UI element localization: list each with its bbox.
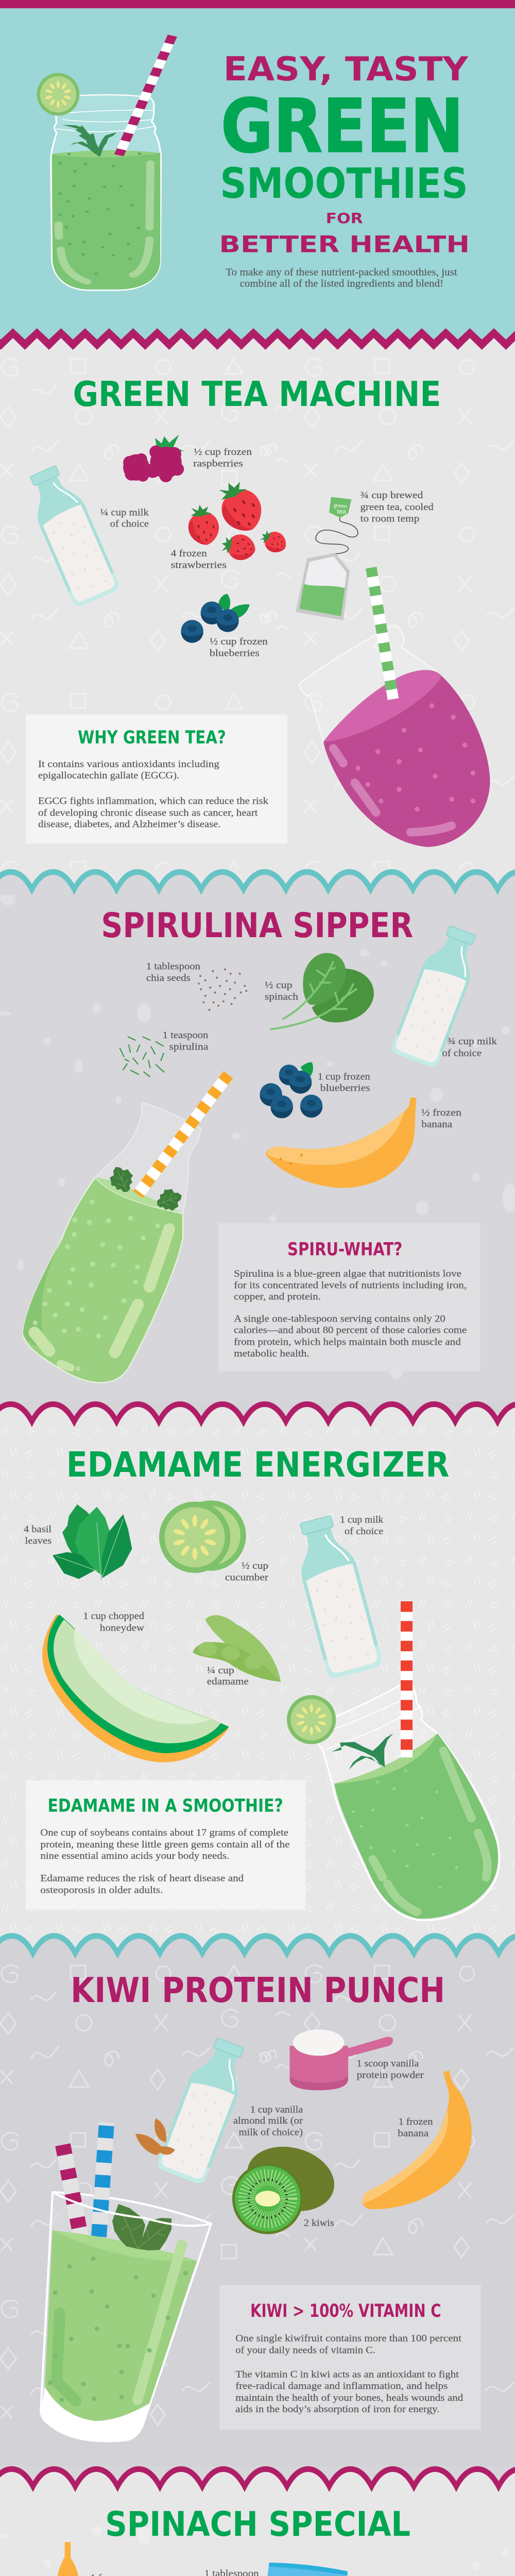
label: strawberries: 4 frozen — [171, 548, 207, 559]
icon: blueberries — [260, 1062, 322, 1118]
panel: kiwi protein punch — [71, 1970, 481, 2430]
title — [219, 49, 470, 258]
label: blueberries — [210, 636, 268, 658]
intro text — [226, 266, 457, 290]
label: blueberries: ½ cup frozen — [210, 636, 268, 647]
label: milk: of choice — [345, 1526, 383, 1537]
panel: edamame in a smoothie: EDAMAME IN A SMOOTHIE? — [47, 1795, 283, 1816]
label: almond milk — [233, 2105, 303, 2138]
icon: green smoothie jar — [287, 1601, 500, 1920]
heading: KIWI PROTEIN PUNCH — [71, 1970, 445, 2010]
label: raspberries — [193, 447, 252, 469]
panel: spiru-what: copper, and protein. — [234, 1292, 321, 1302]
label: banana: ½ frozen — [421, 1108, 462, 1118]
panel: edamame in a smoothie: One cup of soybeans contains about 17 grams of complete — [40, 1827, 288, 1838]
label: milk — [100, 507, 149, 530]
label: honeydew: honeydew — [100, 1623, 144, 1634]
label: raspberries: raspberries — [193, 458, 243, 469]
panel: kiwi vitamin c: KIWI > 100% VITAMIN C — [250, 2300, 441, 2321]
label: spinach: ½ cup — [265, 980, 293, 991]
panel: kiwi vitamin c: The vitamin C in kiwi acts as an antioxidant to fight — [235, 2369, 459, 2380]
label: basil: 4 basil — [24, 1524, 52, 1535]
panel: spirulina sipper — [23, 905, 497, 1383]
label: green tea: to room temp — [360, 514, 419, 524]
heading: SPIRULINA SIPPER — [101, 905, 413, 945]
icon: almond milk bottle — [135, 2033, 254, 2186]
icon: protein scoop — [290, 2029, 393, 2090]
label: green tea: ¾ cup brewed — [360, 490, 423, 501]
icon: milk bottle, green tea — [20, 461, 121, 608]
icon: edamame — [193, 1615, 281, 1682]
label: blueberries: 1 cup frozen — [318, 1071, 370, 1082]
icon: milk bottle, edamame — [288, 1512, 384, 1680]
label: almond milk: milk of choice) — [239, 2127, 303, 2138]
label: honeydew: 1 cup chopped — [83, 1611, 144, 1622]
icon: chia seeds — [199, 970, 246, 1010]
label: banana — [421, 1108, 462, 1130]
panel: spiru-what: from protein, which helps maintain both muscle and — [234, 1337, 461, 1348]
label: chia seeds — [146, 961, 200, 984]
intro text: combine all of the listed ingredients and blend! — [240, 278, 443, 290]
icon: milk bottle, spirulina — [390, 922, 486, 1069]
icon: tea bag — [296, 497, 358, 620]
panel: spiru-what: for its concentrated levels of nutrients including iron, — [234, 1280, 467, 1291]
icon: cucumber — [159, 1500, 246, 1573]
label: strawberries — [171, 548, 227, 570]
label: blueberries: blueberries — [320, 1083, 370, 1094]
label: honeydew — [83, 1611, 144, 1634]
icon: banana — [362, 2071, 472, 2209]
icon: spirulina powder — [120, 1037, 164, 1077]
icon: tea bag: green — [333, 503, 347, 510]
label: raspberries: ½ cup frozen — [194, 447, 252, 457]
label: basil — [24, 1524, 52, 1547]
icon: green smoothie mason jar — [37, 36, 173, 290]
label: milk: of choice — [442, 1048, 482, 1059]
label: cucumber — [225, 1561, 269, 1583]
icon: spinach — [271, 953, 374, 1029]
panel: kiwi vitamin c: free-radical damage and inflammation, and helps — [235, 2381, 448, 2392]
panel: why green tea: WHY GREEN TEA? — [78, 727, 226, 748]
panel: edamame in a smoothie: Edamame reduces the risk of heart disease and — [40, 1873, 244, 1884]
label: spinach: spinach — [265, 991, 299, 1002]
label: strawberries: strawberries — [171, 560, 227, 570]
label: edamame: ¼ cup — [207, 1665, 234, 1676]
label: milk: ¾ cup milk — [448, 1036, 497, 1047]
label: almond milk: 1 cup vanilla — [250, 2105, 303, 2115]
label: protein powder — [357, 2058, 424, 2081]
panel: edamame energizer — [24, 1445, 500, 1920]
label: green tea — [360, 490, 434, 524]
label: milk: 1 cup milk — [340, 1515, 384, 1526]
panel: edamame in a smoothie: osteoporosis in older adults. — [40, 1885, 163, 1895]
panel: kiwi vitamin c — [219, 2285, 481, 2430]
panel: kiwi vitamin c: aids in the body’s absorption of iron for energy. — [235, 2404, 439, 2415]
label: milk: ¼ cup milk — [100, 507, 149, 518]
icon: raspberries — [123, 434, 184, 482]
title: FOR — [326, 210, 363, 227]
panel: kiwi vitamin c: One single kiwifruit contains more than 100 percent — [235, 2333, 462, 2344]
heading: GREEN TEA MACHINE — [73, 374, 441, 414]
label: almond milk: almond milk (or — [233, 2115, 303, 2126]
label: basil: leaves — [25, 1536, 52, 1547]
panel: spiru-what: metabolic health. — [234, 1348, 310, 1359]
label: milk — [340, 1515, 384, 1537]
panel: spinach special — [57, 2504, 494, 2576]
panel: why green tea: disease, diabetes, and Alzheimer’s disease. — [38, 819, 221, 830]
icon: smoothie glass with two straws — [41, 2123, 211, 2441]
panel: why green tea: It contains various antioxidants including — [38, 759, 220, 770]
label: protein powder: protein powder — [357, 2070, 424, 2081]
label: cucumber: ½ cup — [242, 1561, 268, 1571]
panel: spiru-what: SPIRU-WHAT? — [287, 1239, 402, 1260]
icon: purple smoothie jar — [299, 568, 490, 847]
panel: why green tea: of developing chronic disease such as cancer, heart — [38, 807, 258, 818]
panel: header — [37, 36, 470, 290]
label: milk — [442, 1036, 497, 1059]
panel: spiru-what: A single one-tablespoon serving contains only 20 — [234, 1313, 445, 1324]
panel: edamame in a smoothie: protein, meaning these little green gems contain all of the — [40, 1839, 290, 1850]
icon: honeydew melon — [42, 1615, 229, 1762]
panel: why green tea: EGCG fights inflammation, which can reduce the risk — [38, 795, 269, 806]
label: milk: of choice — [110, 519, 149, 530]
label: blueberries — [318, 1071, 370, 1094]
icon: basil leaves — [53, 1504, 132, 1580]
label: spirulina: 1 teaspoon — [163, 1030, 209, 1041]
panel: spiru-what: Spirulina is a blue-green algae that nutritionists love — [234, 1268, 461, 1279]
label: banana: banana — [398, 2128, 429, 2139]
icon: peanut butter jar — [253, 2563, 348, 2576]
panel: edamame in a smoothie — [26, 1781, 305, 1909]
panel: spiru-what: calories—and about 80 percent of those calories come — [234, 1325, 467, 1336]
label: banana — [398, 2116, 433, 2139]
icon: banana — [266, 1097, 417, 1188]
panel: edamame in a smoothie: nine essential amino acids your body needs. — [40, 1851, 229, 1861]
label: spirulina: spirulina — [169, 1041, 209, 1052]
icon: banana — [57, 2542, 187, 2576]
label: cucumber: cucumber — [225, 1572, 269, 1583]
panel: why green tea: epigallocatechin gallate (EGCG). — [38, 770, 179, 781]
icon: tea bag: tea — [337, 507, 347, 515]
panel: why green tea — [26, 715, 287, 844]
label: spinach — [265, 980, 299, 1002]
icon: blueberries — [181, 594, 250, 643]
panel: green tea machine — [26, 374, 490, 847]
label: green tea: green tea, cooled — [360, 502, 434, 513]
title: BETTER HEALTH — [219, 231, 470, 258]
label: edamame — [207, 1665, 249, 1687]
label: spirulina — [163, 1030, 209, 1052]
panel: kiwi vitamin c: of your daily needs of vitamin C. — [235, 2345, 375, 2355]
panel: spiru-what — [218, 1223, 480, 1371]
label: edamame: edamame — [207, 1676, 249, 1687]
heading: EDAMAME ENERGIZER — [66, 1445, 449, 1485]
label: banana: 1 frozen — [399, 2116, 433, 2127]
icon: green smoothie bottle — [23, 1075, 228, 1383]
icon: strawberries — [184, 474, 290, 563]
icon: kiwi — [232, 2138, 341, 2234]
label: banana: banana — [421, 1119, 453, 1130]
label: protein powder: 1 scoop vanilla — [357, 2058, 419, 2069]
label: chia seeds: 1 tablespoon — [146, 961, 200, 972]
label: blueberries: blueberries — [210, 648, 260, 658]
panel: kiwi vitamin c: maintain the health of your bones, heals wounds and — [235, 2393, 464, 2403]
label: chia seeds: chia seeds — [146, 973, 191, 984]
label: kiwis: 2 kiwis — [304, 2218, 334, 2229]
